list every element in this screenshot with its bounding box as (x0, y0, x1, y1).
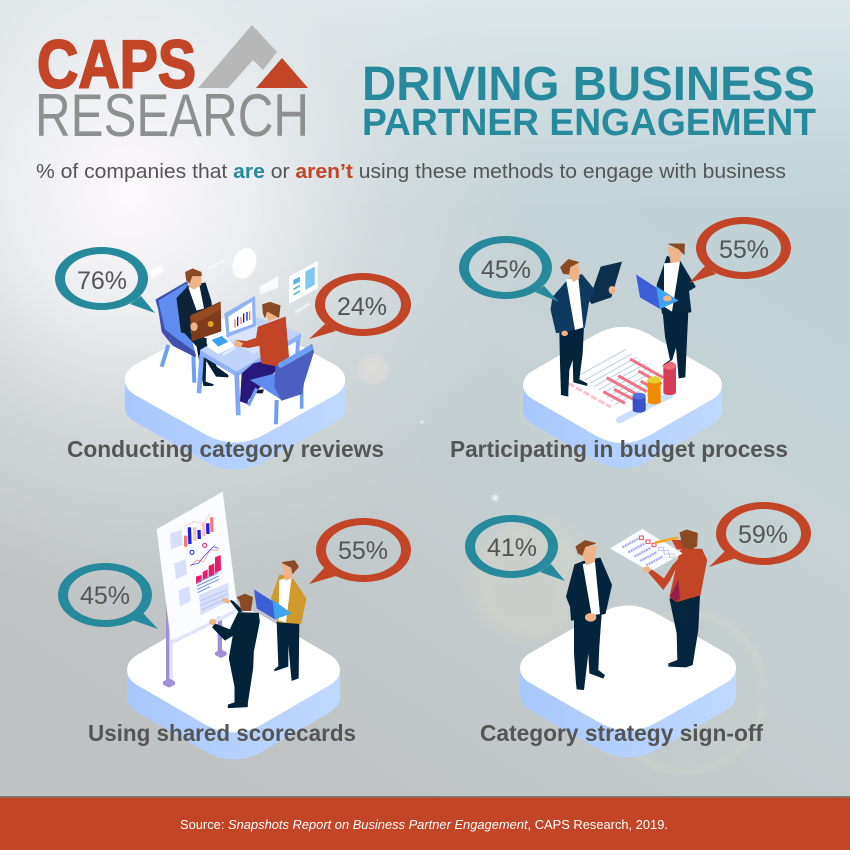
platform (523, 327, 722, 468)
logo: CAPS Research: CAPS (37, 26, 196, 102)
panel: conducting category reviews (55, 244, 411, 470)
label: Participating in budget process (450, 436, 788, 462)
speech bubble: 45% are (459, 236, 559, 302)
speech bubble: 24% aren't: 24% (337, 293, 387, 321)
speech bubble: 55% aren't (309, 518, 411, 584)
title: PARTNER ENGAGEMENT (362, 102, 816, 144)
title (362, 58, 816, 144)
speech bubble: 76% are: 76% (77, 267, 127, 295)
panel: using shared scorecards (58, 492, 411, 760)
logo: CAPS Research: RESEARCH (35, 82, 309, 149)
right chair (296, 387, 307, 409)
label: Conducting category reviews (67, 436, 384, 462)
speech bubble: 59% aren't (709, 502, 811, 567)
left chair (162, 345, 168, 367)
speech bubble: 59% aren't: 59% (738, 521, 788, 549)
board (173, 608, 237, 644)
checklist (610, 529, 683, 572)
speech bubble: 45% are (58, 563, 158, 629)
speech bubble: 24% aren't (309, 273, 411, 339)
cylinders (633, 396, 646, 410)
speech bubble: 41% are: 41% (487, 534, 537, 562)
left man (574, 614, 605, 690)
right man (660, 312, 688, 378)
notebook (207, 334, 235, 354)
speech bubble: 55% aren't: 55% (719, 236, 769, 264)
left man (559, 327, 587, 397)
panel: category strategy sign-off (465, 502, 811, 758)
platform (127, 608, 340, 760)
platform (520, 606, 736, 758)
speech bubble: 76% are (55, 247, 155, 313)
right man (668, 595, 700, 667)
laptop (227, 325, 282, 354)
speech bubble: 55% aren't (689, 217, 791, 283)
footer band with source: Source: Snapshots Report on Business Partner Engagement , CAPS Research, 2019. (180, 818, 668, 832)
panel: participating in budget process (450, 217, 791, 468)
speech bubble: 45% are: 45% (481, 256, 531, 284)
front man (231, 601, 242, 612)
table (199, 355, 202, 393)
seated man (199, 343, 228, 377)
title: DRIVING BUSINESS (362, 58, 815, 111)
platform (125, 318, 345, 470)
speech bubble: 41% are (465, 515, 565, 581)
illustration: two people over a chart (551, 244, 695, 420)
label: Category strategy sign-off (480, 720, 763, 746)
label: Using shared scorecards (88, 720, 356, 746)
illustration: two people at a scorecard board (157, 492, 306, 708)
speech bubble: 55% aren't: 55% (338, 537, 388, 565)
logo: CAPS Research (35, 25, 309, 149)
speech bubble: 45% are: 45% (80, 582, 130, 610)
illustration: two people meeting at a desk (149, 244, 318, 424)
subtitle: % of companies that are or aren’t using these methods to engage with business (36, 160, 786, 183)
footer band with source (0, 796, 850, 850)
right man in mustard jacket (274, 622, 299, 681)
man in red sweater (240, 362, 281, 404)
illustration: two people reviewing a checklist (567, 529, 707, 690)
poles (166, 597, 172, 681)
